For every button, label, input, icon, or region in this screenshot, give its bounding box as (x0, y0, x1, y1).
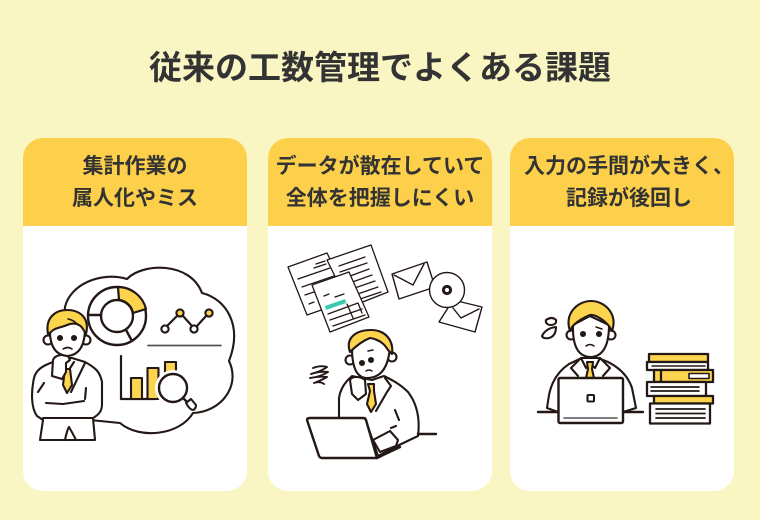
man head (44, 336, 52, 344)
tie (586, 362, 594, 378)
illustration: scattered documents and man (288, 245, 482, 458)
heading: card 3: 記録が後回し (566, 187, 692, 210)
title: 従来の工数管理でよくある課題 (149, 49, 611, 86)
panel: card 1 (23, 138, 247, 491)
stack of books (647, 354, 713, 424)
illustration: man with laptop and books (538, 301, 713, 424)
hand on keyboard (373, 431, 398, 452)
panel: card 2 (268, 138, 492, 491)
sweat drops (542, 318, 556, 338)
illustration: thinking man with charts (32, 268, 234, 440)
head (346, 356, 354, 364)
desk (538, 411, 643, 413)
documents (288, 245, 388, 332)
heading: card 2: データが散在していて (276, 155, 484, 178)
yellow tie (367, 384, 376, 412)
yellow tie (63, 369, 72, 393)
head (566, 330, 576, 340)
heading: card 2: 全体を把握しにくい (286, 187, 474, 210)
line chart (148, 309, 221, 346)
envelope 1 (392, 262, 435, 299)
heading: card 3 (510, 138, 734, 226)
laptop (307, 418, 377, 458)
man body (32, 358, 102, 440)
squiggle (310, 366, 328, 384)
donut chart (88, 287, 146, 345)
teal highlight (325, 299, 346, 310)
body (547, 358, 636, 412)
thought cloud (60, 268, 234, 433)
desk (418, 433, 436, 435)
hand (350, 377, 366, 400)
envelope 2 (439, 300, 482, 332)
heading: card 1: 集計作業の (82, 155, 188, 178)
icon: magnifier (155, 370, 196, 410)
man body (339, 376, 419, 456)
heading: card 1: 属人化やミス (72, 187, 198, 210)
hand on chin (52, 355, 70, 379)
panel: card 3 (510, 138, 734, 491)
laptop (558, 378, 623, 423)
heading: card 3: 入力の手間が大きく、 (524, 155, 734, 178)
icon: disc (430, 272, 464, 308)
heading: card 1 (23, 138, 247, 226)
heading: card 2 (268, 138, 492, 226)
bar chart (121, 356, 176, 399)
